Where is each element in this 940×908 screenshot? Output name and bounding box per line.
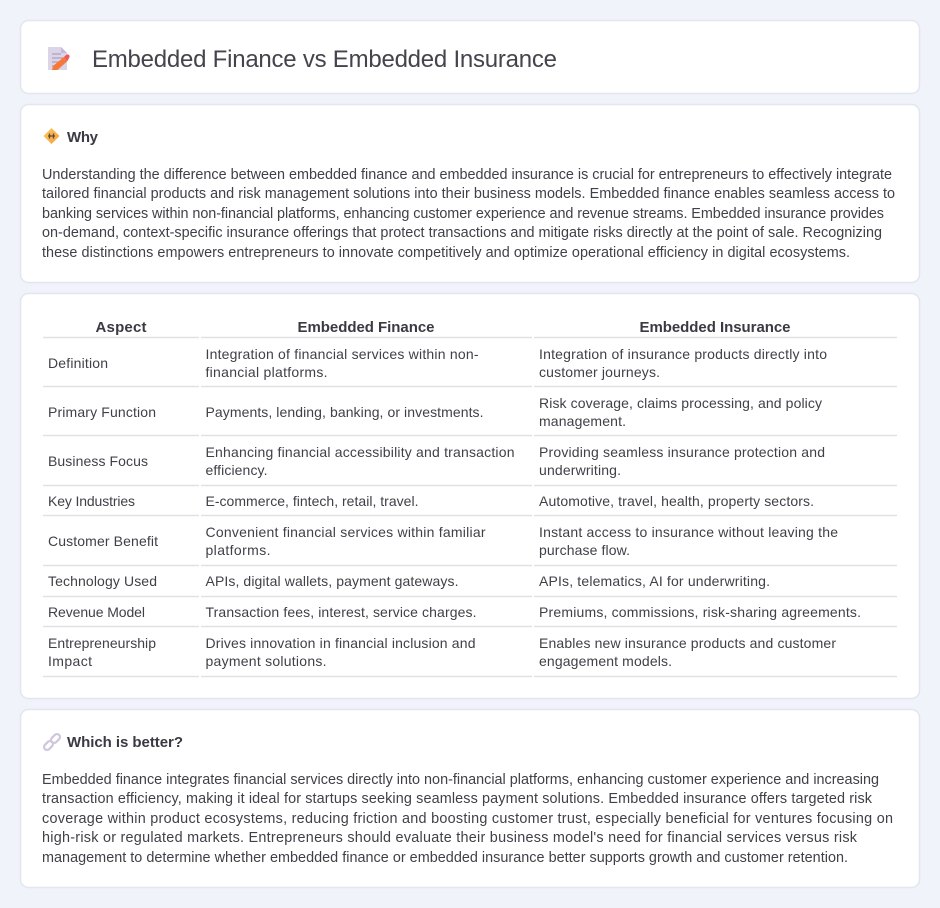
- text block: which is better: coverage within product ecosystems, reducing friction and boosting customer trust, especially beneficial for ventures focusing on: [42, 811, 893, 827]
- row: key industries: E-commerce, fintech, retail, travel.: [206, 493, 418, 509]
- row: entrepreneurship impact: Impact: [48, 653, 92, 669]
- row: technology used: APIs, telematics, AI for underwriting.: [539, 573, 770, 589]
- row: primary function: [48, 395, 822, 429]
- row: business focus: efficiency.: [206, 462, 268, 478]
- row: technology used: APIs, digital wallets, payment gateways.: [206, 573, 458, 589]
- heading: which is better: Which is better?: [67, 734, 183, 751]
- row: revenue model: [48, 604, 861, 620]
- panel: which is better: [20, 710, 920, 888]
- text block: why: on-demand, context-specific insurance offerings that protect transactions and mitigate risks directly at the point of sale. Recognizing: [42, 225, 882, 241]
- title: Embedded Finance vs Embedded Insurance: [92, 46, 557, 73]
- row: primary function: management.: [539, 413, 626, 429]
- row: customer benefit: Instant access to insurance without leaving the: [539, 524, 838, 540]
- table header: Embedded Insurance: [640, 319, 790, 336]
- row: business focus: [48, 444, 825, 478]
- text block: which is better: management to determine whether embedded finance or embedded insurance better supports growth and customer retention.: [42, 850, 848, 866]
- panel: comparison table: [20, 294, 920, 698]
- row: entrepreneurship impact: Enables new insurance products and customer: [539, 635, 836, 651]
- row: definition: customer journeys.: [539, 364, 660, 380]
- row: customer benefit: platforms.: [206, 542, 270, 558]
- row: primary function: Risk coverage, claims processing, and policy: [539, 395, 822, 411]
- row: key industries: [48, 493, 814, 509]
- icon: diamond sign: [44, 128, 60, 144]
- row: definition: financial platforms.: [206, 364, 328, 380]
- text block: why: tailored financial products and risk management solutions into their business models. Embedded finance enables seamless access to: [42, 186, 895, 202]
- text block: which is better: Embedded finance integrates financial services directly into non-financial platforms, enhancing customer experience and increasing: [42, 772, 879, 788]
- row: key industries: Automotive, travel, health, property sectors.: [539, 493, 814, 509]
- heading: why: Why: [67, 129, 99, 146]
- row: primary function: Payments, lending, banking, or investments.: [206, 404, 484, 420]
- icon: link: [43, 733, 61, 751]
- row: key industries: Key Industries: [48, 493, 135, 509]
- row: business focus: Providing seamless insurance protection and: [539, 444, 825, 460]
- row: business focus: underwriting.: [539, 462, 621, 478]
- icon: document with pencil: [48, 47, 70, 70]
- row: definition: [48, 346, 827, 380]
- row: entrepreneurship impact: Entrepreneurship: [48, 635, 156, 651]
- row: technology used: Technology Used: [48, 573, 157, 589]
- row: definition: Integration of financial services within non-: [206, 346, 479, 362]
- row: revenue model: Revenue Model: [48, 604, 145, 620]
- row: technology used: [48, 573, 770, 589]
- row: business focus: Enhancing financial accessibility and transaction: [206, 444, 514, 460]
- text block: which is better: [42, 772, 893, 866]
- text block: why: banking services within non-financial platforms, enhancing customer experience and revenue streams. Embedded insurance provides: [42, 206, 884, 222]
- text block: why: Understanding the difference between embedded finance and embedded insurance is crucial for entrepreneurs to effectively integrate: [42, 167, 892, 183]
- row: entrepreneurship impact: [48, 635, 836, 669]
- row: customer benefit: purchase flow.: [539, 542, 630, 558]
- row: entrepreneurship impact: payment solutions.: [206, 653, 326, 669]
- row: entrepreneurship impact: Drives innovation in financial inclusion and: [206, 635, 476, 651]
- row: revenue model: Premiums, commissions, risk-sharing agreements.: [539, 604, 861, 620]
- row: definition: Definition: [48, 355, 108, 371]
- table header: Embedded Finance: [298, 319, 434, 336]
- text block: why: [42, 167, 895, 261]
- row: definition: Integration of insurance products directly into: [539, 346, 827, 362]
- row: revenue model: Transaction fees, interest, service charges.: [206, 604, 476, 620]
- row: entrepreneurship impact: engagement models.: [539, 653, 672, 669]
- table header: [96, 319, 790, 336]
- header panel: [20, 20, 920, 94]
- row: customer benefit: Convenient financial services within familiar: [206, 524, 486, 540]
- row: business focus: Business Focus: [48, 453, 148, 469]
- text block: why: these distinctions empowers entrepreneurs to innovate competitively and optimize operational efficiency in digital ecosystems.: [42, 245, 850, 261]
- text block: which is better: high-risk or regulated markets. Entrepreneurs should evaluate their business model's need for financial services versus risk: [42, 830, 858, 846]
- panel: why: [20, 104, 920, 282]
- row: customer benefit: Customer Benefit: [48, 533, 158, 549]
- table header: Aspect: [96, 319, 146, 336]
- text block: which is better: transaction efficiency, making it ideal for startups seeking seamless payment solutions. Embedded insurance offers targeted risk: [42, 791, 873, 807]
- row: customer benefit: [48, 524, 838, 558]
- row: primary function: Primary Function: [48, 404, 156, 420]
